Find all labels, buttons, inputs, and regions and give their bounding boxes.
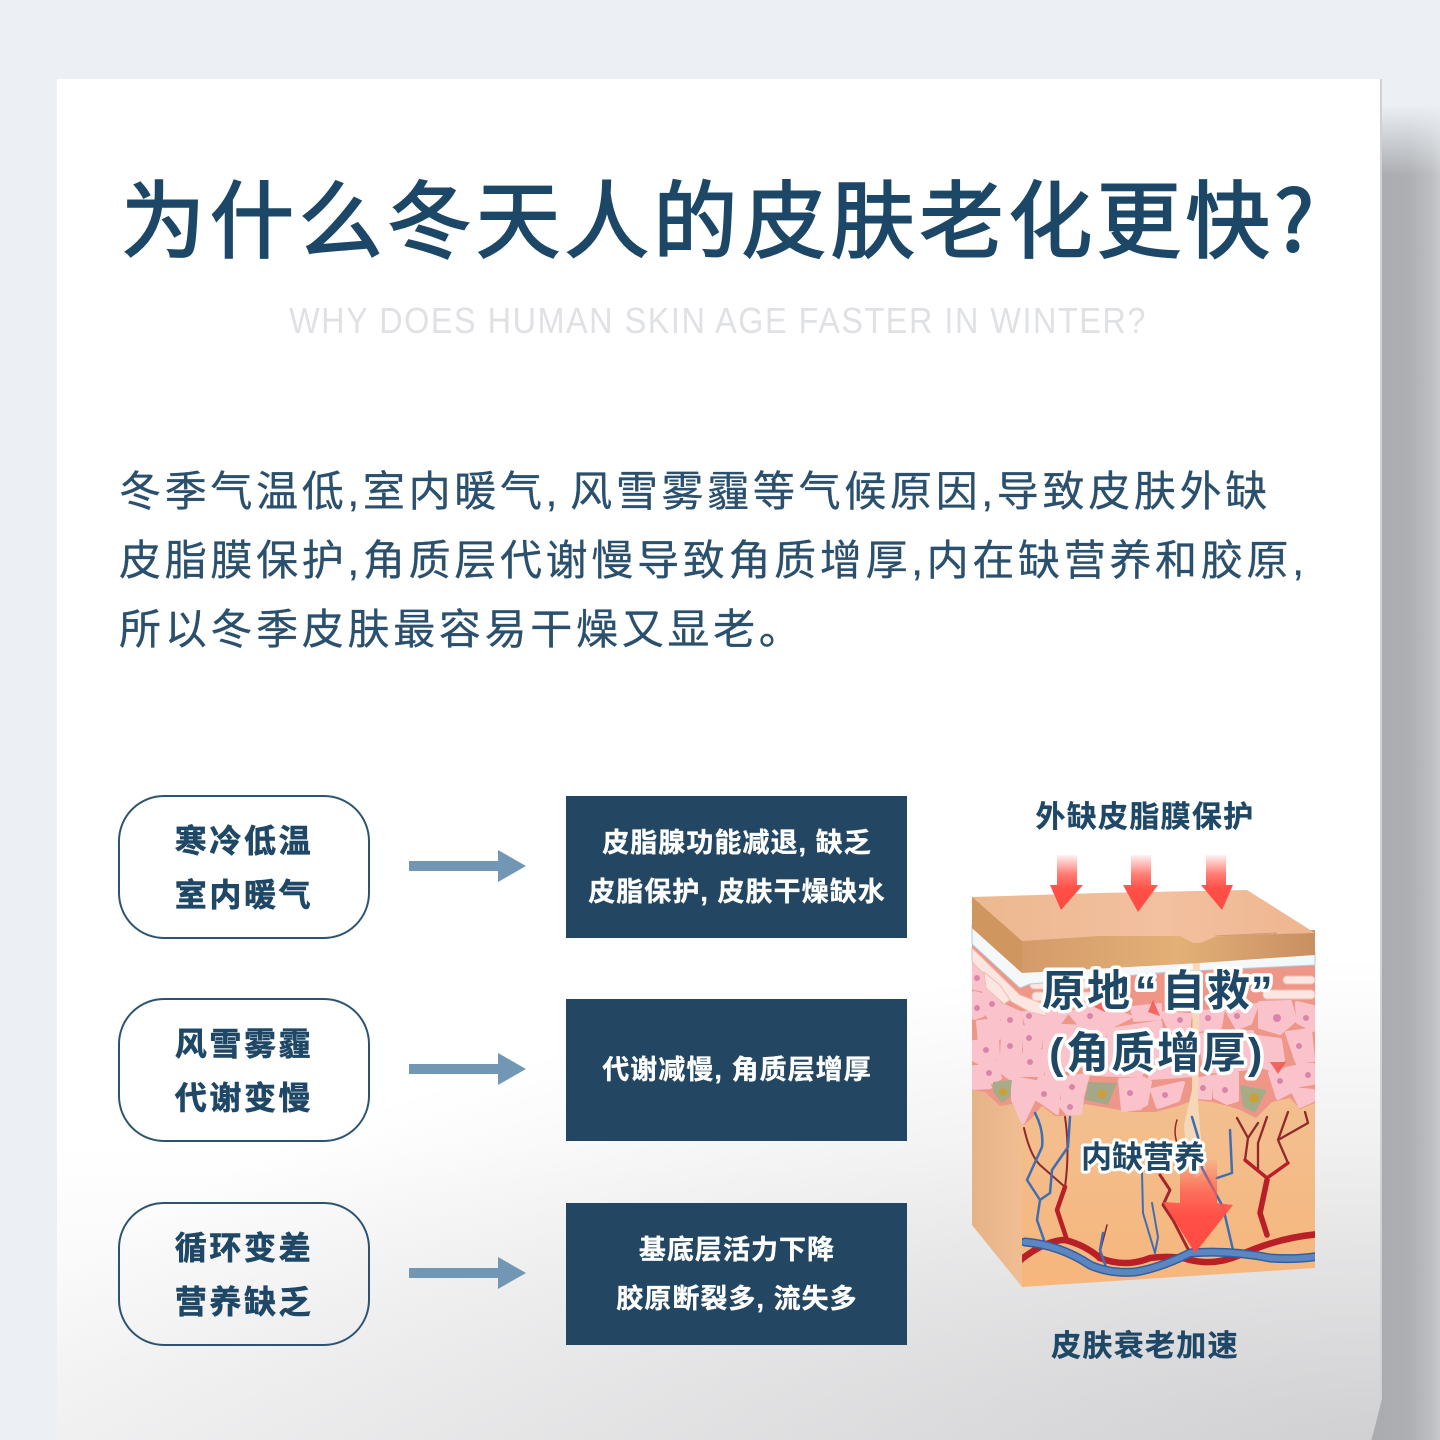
label: 原地自救: (角质增厚) bbox=[1049, 1030, 1265, 1078]
diagram caption bottom: 皮肤衰老加速 bbox=[1051, 1330, 1239, 1363]
small red arrows in skin bbox=[1094, 1000, 1286, 1074]
arteries bbox=[1024, 1117, 1068, 1187]
dermis block bbox=[972, 1060, 1315, 1287]
effect box 2 bbox=[567, 999, 907, 1141]
label: 原地自救: 自救 bbox=[1162, 968, 1252, 1016]
arrow 3 bbox=[409, 1257, 526, 1289]
skin cross-section diagram bbox=[972, 855, 1316, 1287]
effect box 1: 皮脂腺功能减退, 缺乏 bbox=[602, 828, 872, 858]
label: 原地自救: ” bbox=[1251, 968, 1274, 1016]
cause pill: circulation bbox=[118, 1202, 370, 1346]
red arrows: external damage bbox=[1050, 855, 1233, 912]
cell nuclei bbox=[974, 975, 1311, 1110]
label: 原地自救 bbox=[1042, 968, 1274, 1078]
keratinocyte cells bbox=[974, 965, 1313, 1122]
epidermis layer bbox=[972, 925, 1315, 1125]
effect box 3: 基底层活力下降 bbox=[639, 1234, 835, 1264]
big red arrow: nutrition loss bbox=[1163, 1160, 1233, 1253]
cause pill: weather bbox=[118, 998, 370, 1142]
horny layer block bbox=[972, 890, 1315, 973]
cause pill: weather: 风雪雾霾 bbox=[175, 1026, 313, 1062]
hair shaft bbox=[1184, 940, 1206, 1178]
label: 原地自救: 原地 bbox=[1042, 968, 1132, 1016]
title: 为什么冬天人的皮肤老化更快? bbox=[121, 155, 1319, 276]
cause pill: weather: 代谢变慢 bbox=[175, 1080, 313, 1116]
english subtitle: WHY DOES HUMAN SKIN AGE FASTER IN WINTER? bbox=[289, 300, 1147, 341]
label: 原地自救: “ bbox=[1135, 968, 1158, 1016]
effect box 3 bbox=[567, 1203, 907, 1345]
intro paragraph: 皮脂膜保护,角质层代谢慢导致角质增厚,内在缺营养和胶原, bbox=[119, 537, 1308, 584]
label: 内缺营养: 内缺营养 bbox=[1081, 1140, 1205, 1175]
effect box 3: 胶原断裂多, 流失多 bbox=[616, 1284, 858, 1314]
intro paragraph bbox=[119, 468, 1308, 653]
card shadow bbox=[1370, 105, 1440, 1440]
cause pill: cold: 寒冷低温 bbox=[175, 823, 313, 859]
cause pill: cold bbox=[118, 795, 370, 939]
blood vessels bbox=[1018, 1112, 1320, 1272]
effect box 1: 皮脂保护, 皮肤干燥缺水 bbox=[588, 876, 886, 906]
stratum corneum strip bbox=[972, 925, 1315, 988]
cause pill: circulation: 循环变差 bbox=[175, 1230, 313, 1266]
diagram caption top: 外缺皮脂膜保护 bbox=[1035, 801, 1255, 834]
arrow 1 bbox=[409, 850, 526, 882]
damaged cells bbox=[993, 1080, 1267, 1113]
effect box 1 bbox=[567, 796, 907, 938]
intro paragraph: 冬季气温低,室内暖气, 风雪雾霾等气候原因,导致皮肤外缺 bbox=[119, 468, 1271, 515]
cause pill: circulation: 营养缺乏 bbox=[175, 1284, 313, 1320]
arrow 2 bbox=[409, 1053, 526, 1085]
cause pill: cold: 室内暖气 bbox=[175, 877, 313, 913]
intro paragraph: 所以冬季皮肤最容易干燥又显老。 bbox=[119, 606, 805, 653]
veins bbox=[1027, 1113, 1070, 1243]
effect box 2: 代谢减慢, 角质层增厚 bbox=[602, 1055, 872, 1085]
flat upper cells bbox=[972, 948, 1315, 1016]
